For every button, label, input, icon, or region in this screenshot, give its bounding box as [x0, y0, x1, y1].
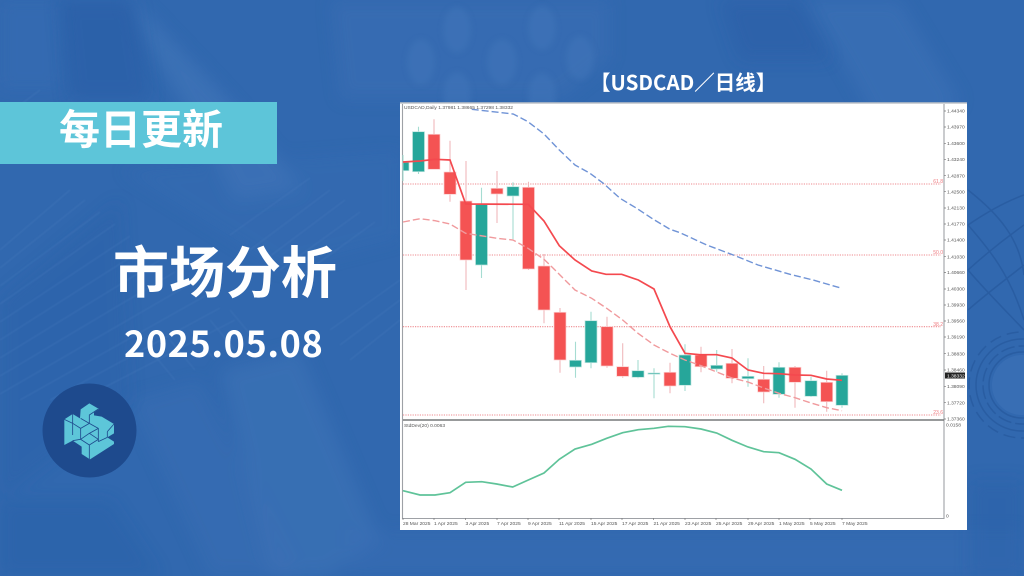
price axis: 1.39190	[947, 335, 965, 341]
chart frame	[402, 104, 944, 518]
date axis: 3 Apr 2025	[466, 521, 489, 527]
price axis: 1.42130	[947, 206, 965, 212]
fibonacci labels: 38.2	[933, 322, 943, 328]
price axis: 1.43970	[947, 125, 965, 131]
date axis: 29 Apr 2025	[748, 521, 775, 527]
price axis: 1.42500	[947, 189, 965, 195]
banner text: 每日更新	[59, 96, 223, 156]
price axis: 1.39930	[947, 303, 965, 309]
date axis: 23 Apr 2025	[685, 521, 712, 527]
background: diagonal ridges	[0, 90, 400, 400]
date axis: 7 Apr 2025	[497, 521, 521, 527]
price axis: 1.40300	[947, 287, 965, 293]
price axis: 1.41770	[947, 222, 965, 228]
icon: company logo	[42, 384, 136, 478]
date axis: 11 Apr 2025	[559, 521, 585, 527]
fibonacci labels: 61.8	[933, 179, 943, 185]
line: blue dashed moving average	[472, 109, 842, 288]
background: guilloche rosette	[968, 190, 1024, 438]
date axis	[403, 518, 868, 527]
price axis: 1.37360	[947, 417, 965, 423]
date axis: 7 May 2025	[842, 521, 868, 527]
price axis: 1.43600	[947, 141, 965, 147]
heading: market analysis: 市场分析	[113, 229, 337, 310]
price axis	[944, 109, 965, 519]
date axis: 21 Apr 2025	[654, 521, 680, 527]
candlestick bodies: bearish	[428, 134, 833, 402]
current price tag: 1.38332	[947, 373, 965, 379]
price axis: 1.39560	[947, 319, 965, 325]
price axis: 1.44340	[947, 109, 965, 115]
chart panel background	[400, 103, 967, 530]
price axis: 1.37720	[947, 400, 965, 406]
date axis: 15 Apr 2025	[591, 521, 618, 527]
fibonacci levels	[403, 184, 941, 415]
date axis: 1 May 2025	[779, 521, 805, 527]
date: 2025.05.08	[124, 316, 323, 368]
candlestick wicks	[403, 119, 842, 412]
panel: chart screenshot	[400, 103, 967, 530]
indicator label: StdDev(20) 0.0063	[404, 423, 445, 429]
candlestick bodies: bullish	[403, 132, 848, 405]
price axis: 1.41400	[947, 238, 965, 244]
date axis: 17 Apr 2025	[622, 521, 649, 527]
price axis: 1.38460	[947, 368, 965, 374]
price axis: 1.38090	[947, 384, 965, 390]
price axis: 1.42870	[947, 173, 965, 179]
line: pink dashed moving average	[403, 219, 842, 411]
date axis: 9 Apr 2025	[528, 521, 552, 527]
date axis: 5 May 2025	[810, 521, 836, 527]
line: standard deviation indicator	[403, 426, 842, 495]
current price tag	[945, 372, 965, 379]
date axis: 28 Mar 2025	[403, 521, 431, 527]
price axis: 0	[946, 514, 949, 520]
price axis: 0.0158	[946, 422, 961, 428]
price axis: 1.40660	[947, 270, 965, 276]
chart title: 【USDCAD／日线】	[590, 66, 776, 96]
banner: daily update	[0, 102, 277, 164]
price axis: 1.38830	[947, 351, 965, 357]
fibonacci labels: 50.0	[933, 250, 943, 256]
line: red moving average	[403, 159, 842, 380]
fibonacci labels: 23.6	[933, 410, 943, 416]
date axis: 1 Apr 2025	[434, 521, 458, 527]
fibonacci labels	[933, 179, 943, 416]
price axis: 1.43240	[947, 157, 965, 163]
price axis: 1.41030	[947, 254, 965, 260]
date axis: 25 Apr 2025	[716, 521, 743, 527]
chart header text: USDCAD,Daily 1.37981 1.38665 1.37298 1.38332	[404, 105, 513, 111]
